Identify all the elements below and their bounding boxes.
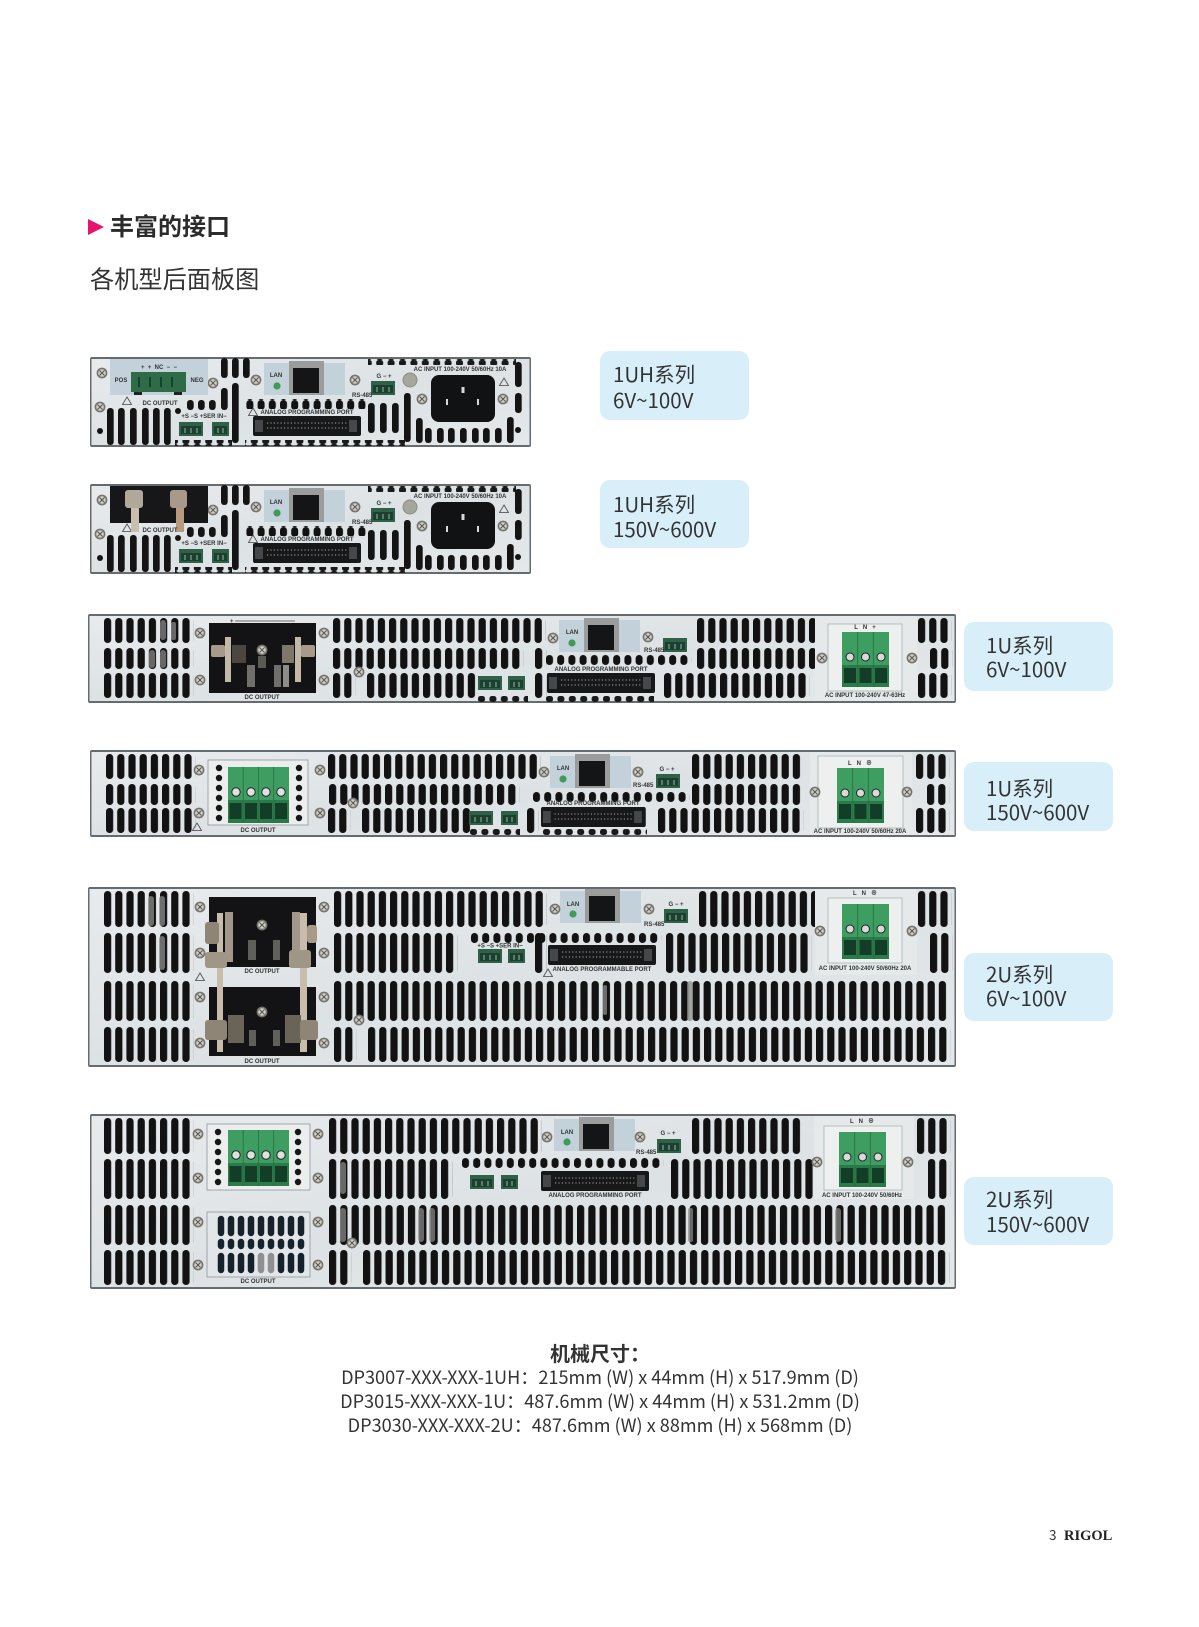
label: 2U 6V-100V — [964, 953, 1113, 1021]
panel: 1U rear 150V-600V: G − + — [659, 767, 675, 773]
panel: 1UH rear 150V-600V: LAN — [270, 500, 282, 506]
panel: 1UH rear 150V-600V: DC OUTPUT — [142, 528, 178, 534]
panel: 2U rear 150V-600V: L N ⊕ — [850, 1118, 874, 1125]
panel: 2U rear 150V-600V — [90, 1114, 956, 1289]
panel: 1UH rear 6V-100V: AC INPUT 100-240V 50/60Hz 10A — [414, 367, 507, 373]
panel: 1U rear 150V-600V: ANALOG PROGRAMMING PORT — [546, 801, 640, 807]
panel: 2U rear 150V-600V: AC INPUT 100-240V 50/60Hz — [822, 1193, 902, 1199]
label: 1UH 150V-600V: 1UH系列 — [613, 488, 695, 518]
panel: 1U rear 150V-600V: LAN — [557, 766, 569, 772]
panel: 1UH rear 6V-100V: NEG — [190, 378, 204, 384]
label: 2U 150V-600V — [964, 1177, 1113, 1245]
panel: 2U rear 6V-100V: G − + — [668, 902, 684, 908]
mechanical dimensions text: DP3007-XXX-XXX-1UH：215mm (W) x 44mm (H) x 517.9mm (D) — [341, 1364, 859, 1390]
label: 1U 6V-100V: 6V~100V — [986, 653, 1067, 683]
panel: 1U rear 6V-100V: L N + — [854, 625, 876, 631]
panel: 1U rear 6V-100V: AC INPUT 100-240V 47-63Hz — [825, 693, 905, 699]
DC output block — [209, 623, 316, 693]
footer: page number and logo: 3 — [1049, 1524, 1056, 1544]
panel: 2U rear 6V-100V: AC INPUT 100-240V 50/60Hz 20A — [819, 966, 912, 972]
subheading: 各机型后面板图: 各机型后面板图 — [90, 260, 259, 295]
panel: 2U rear 6V-100V: LAN — [567, 902, 579, 908]
icon: pink arrow — [88, 219, 104, 235]
label: 2U 6V-100V: 2U系列 — [986, 958, 1053, 988]
panel: 2U rear 150V-600V: G − + — [660, 1131, 676, 1137]
panel: 2U rear 6V-100V: L N ⊕ — [853, 890, 877, 897]
DC terminal box — [208, 760, 308, 825]
mechanical dimensions text: DP3030-XXX-XXX-2U：487.6mm (W) x 88mm (H) x 568mm (D) — [348, 1412, 852, 1438]
label: 1UH 150V-600V — [600, 480, 749, 548]
label: 1U 6V-100V: 1U系列 — [986, 629, 1053, 659]
panel: 2U rear 6V-100V: ANALOG PROGRAMMABLE PORT — [553, 967, 652, 973]
panel: 1UH rear 150V-600V: +S −S +SER IN− — [181, 541, 227, 547]
heading: 丰富的接口: 丰富的接口 — [110, 207, 230, 242]
panel: 1U rear 150V-600V — [90, 750, 956, 837]
panel: 1UH rear 6V-100V: RS-485 — [352, 393, 373, 399]
panel: 1UH rear 6V-100V: + + NC − − — [141, 365, 177, 371]
panel: 1U rear 150V-600V: DC OUTPUT — [240, 828, 276, 834]
footer: page number and logo — [1049, 1524, 1113, 1544]
panel: 1U rear 150V-600V: RS-485 — [633, 783, 654, 789]
panel: 1UH rear 150V-600V: RS-485 — [352, 520, 373, 526]
panel: 1UH rear 6V-100V — [90, 357, 531, 447]
panel: 1U rear 6V-100V: + — [230, 619, 234, 625]
panel: 1UH rear 150V-600V: G − + — [376, 501, 392, 507]
panel: 1UH rear 6V-100V: DC OUTPUT — [142, 401, 178, 407]
panel: 1UH rear 6V-100V: LAN — [270, 373, 282, 379]
label: 1U 150V-600V: 150V~600V — [986, 796, 1089, 826]
mechanical dimensions text: DP3015-XXX-XXX-1U：487.6mm (W) x 44mm (H) x 531.2mm (D) — [340, 1388, 860, 1414]
label: 1U 150V-600V — [964, 762, 1113, 831]
label: 2U 6V-100V: 6V~100V — [986, 982, 1067, 1012]
streaks seen through the vents — [340, 1162, 841, 1242]
mechanical dimensions text: 机械尺寸： — [550, 1338, 650, 1367]
footer: page number and logo: RIGOL — [1064, 1528, 1113, 1544]
DC output blocks — [205, 897, 318, 1056]
panel: 1UH rear 150V-600V — [90, 484, 531, 574]
panel: 1U rear 6V-100V: DC OUTPUT — [244, 695, 280, 701]
label: 1UH 6V-100V: 6V~100V — [613, 384, 694, 414]
panel: 2U rear 6V-100V: RS-485 — [644, 922, 665, 928]
panel: 1U rear 150V-600V: L N ⊕ — [848, 760, 872, 767]
panel: 2U rear 150V-600V: RS-485 — [636, 1150, 657, 1156]
panel: 2U rear 150V-600V: ANALOG PROGRAMMING PORT — [548, 1193, 642, 1199]
panel: 2U rear 150V-600V: LAN — [561, 1130, 573, 1136]
label: 1UH 150V-600V: 150V~600V — [613, 513, 716, 543]
panel: 1UH rear 6V-100V: POS — [115, 378, 127, 384]
panel: 2U rear 6V-100V: DC OUTPUT — [244, 969, 280, 975]
panel: 1UH rear 6V-100V: +S −S +SER IN− — [181, 414, 227, 420]
streaks seen through the vents — [148, 896, 693, 1021]
panel: 1U rear 6V-100V: ANALOG PROGRAMMING PORT — [554, 667, 648, 673]
label: 2U 150V-600V: 150V~600V — [986, 1208, 1089, 1238]
mechanical dimensions text — [340, 1338, 860, 1438]
label: 1U 6V-100V — [964, 622, 1113, 691]
panel: 1UH rear 150V-600V: ANALOG PROGRAMMING PORT — [260, 537, 354, 543]
panel: 1U rear 6V-100V: RS-485 — [644, 648, 665, 654]
label: 2U 150V-600V: 2U系列 — [986, 1183, 1053, 1213]
label: 1U 150V-600V: 1U系列 — [986, 772, 1053, 802]
label: 1UH 6V-100V — [600, 351, 749, 420]
label: 1UH 6V-100V: 1UH系列 — [613, 358, 695, 388]
panel: 2U rear 6V-100V: DC OUTPUT — [244, 1059, 280, 1065]
panel: 2U rear 6V-100V: +S −S +SER IN− — [477, 944, 523, 950]
panel: 1UH rear 6V-100V: ANALOG PROGRAMMING PORT — [260, 410, 354, 416]
panel: 1U rear 6V-100V — [88, 614, 956, 703]
panel: 1U rear 6V-100V: LAN — [566, 630, 578, 636]
panel: 2U rear 150V-600V: DC OUTPUT — [240, 1279, 276, 1285]
DC terminal box — [207, 1124, 310, 1190]
panel: 1UH rear 6V-100V: G − + — [376, 374, 392, 380]
vent cover — [207, 1212, 310, 1277]
panel: 1UH rear 150V-600V: AC INPUT 100-240V 50/60Hz 10A — [414, 494, 507, 500]
panel: 1U rear 150V-600V: AC INPUT 100-240V 50/60Hz 20A — [814, 829, 907, 835]
panel: 2U rear 6V-100V — [88, 887, 956, 1067]
